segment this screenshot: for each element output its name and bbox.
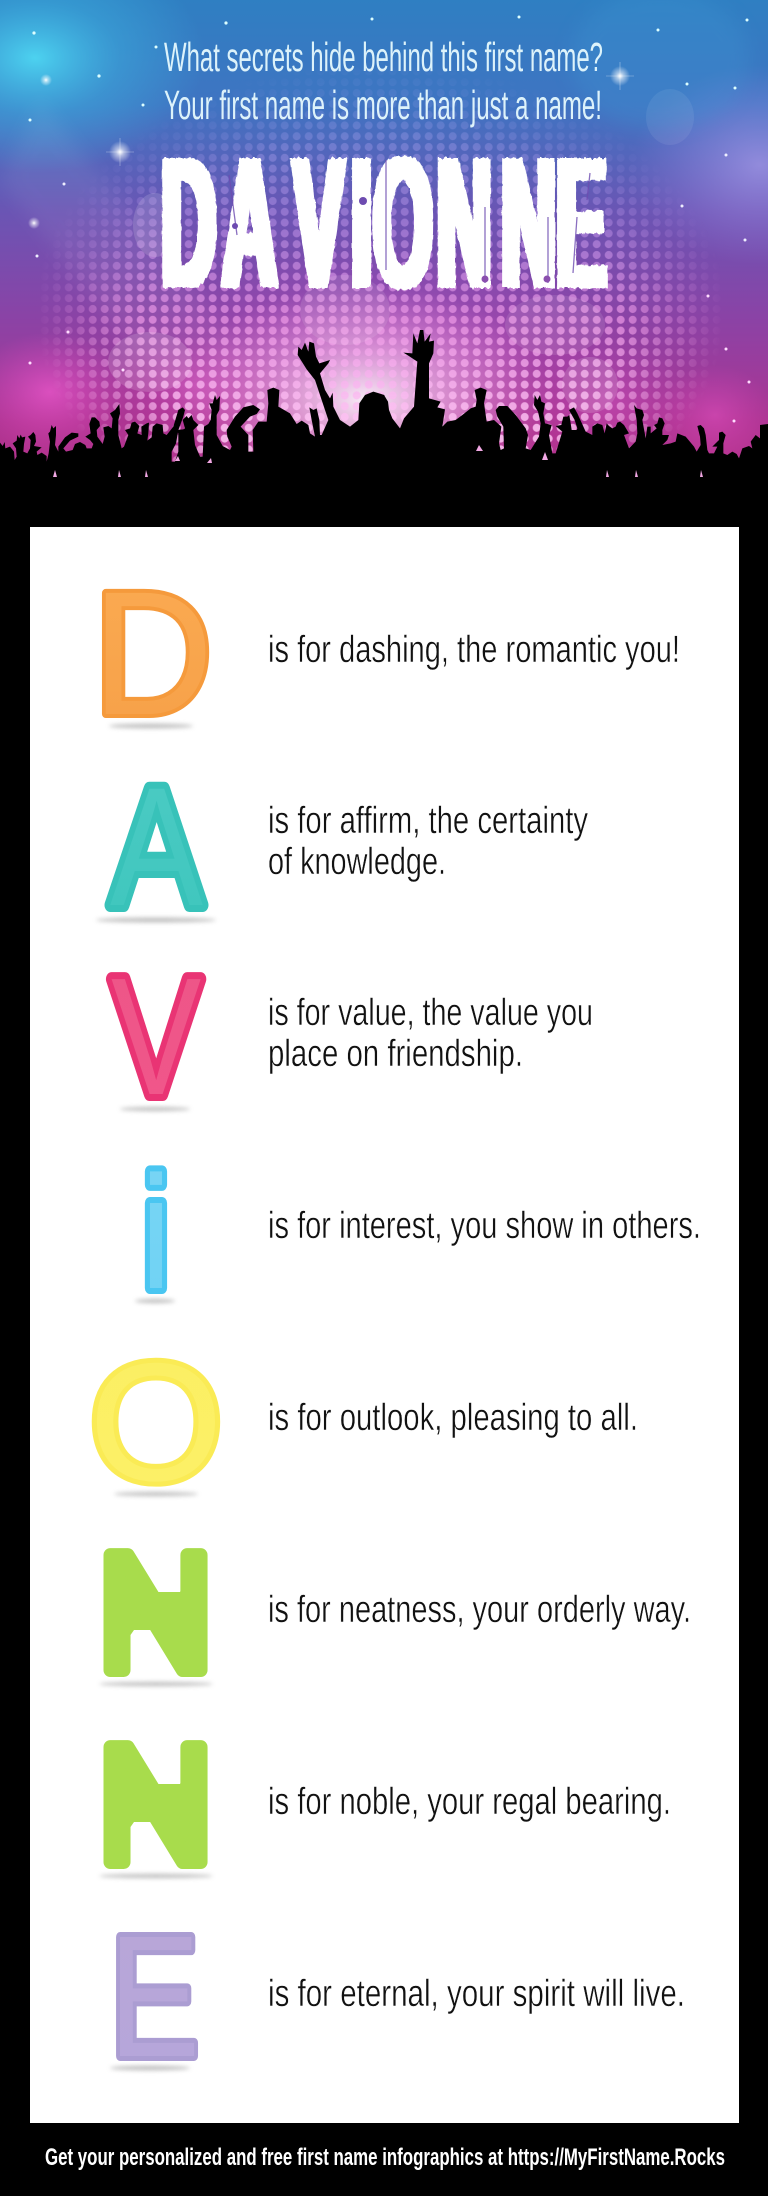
text: A meaning: is for affirm, the certainty — [268, 800, 588, 842]
text: A meaning: of knowledge. — [268, 841, 446, 883]
text: O meaning: is for outlook, pleasing to all. — [268, 1397, 638, 1439]
row: letter V — [111, 943, 593, 1130]
row: letter A — [96, 752, 588, 941]
icon: letter N: N — [97, 1519, 214, 1706]
icon: second letter N: N — [97, 1711, 214, 1898]
icon: letter i: i — [141, 1143, 171, 1322]
icon: letter O: O — [89, 1329, 223, 1516]
gaps of light in the crowd — [53, 445, 703, 477]
header tagline — [164, 34, 603, 128]
icon: letter E: E — [109, 1901, 200, 2094]
row: letter O — [89, 1329, 638, 1516]
icon: letter A: A — [110, 752, 204, 941]
row: letter i — [135, 1143, 701, 1322]
text: V meaning — [268, 992, 593, 1075]
text: V meaning: place on friendship. — [268, 1033, 523, 1075]
row: letter E — [109, 1901, 685, 2094]
sparkles — [28, 16, 750, 422]
icon: letter D: D — [92, 555, 213, 752]
row: second letter N — [97, 1711, 671, 1898]
header background: stage lights — [0, 0, 768, 462]
row: letter D — [92, 555, 680, 752]
text: A meaning — [268, 800, 588, 883]
icon: letter V: V — [111, 943, 201, 1130]
name title: DAVIONNE: DAVIONNE — [161, 120, 607, 328]
text: V meaning: is for value, the value you — [268, 992, 593, 1034]
crowd silhouette — [0, 330, 768, 530]
white content panel — [30, 527, 739, 2123]
row: letter N — [97, 1519, 691, 1706]
